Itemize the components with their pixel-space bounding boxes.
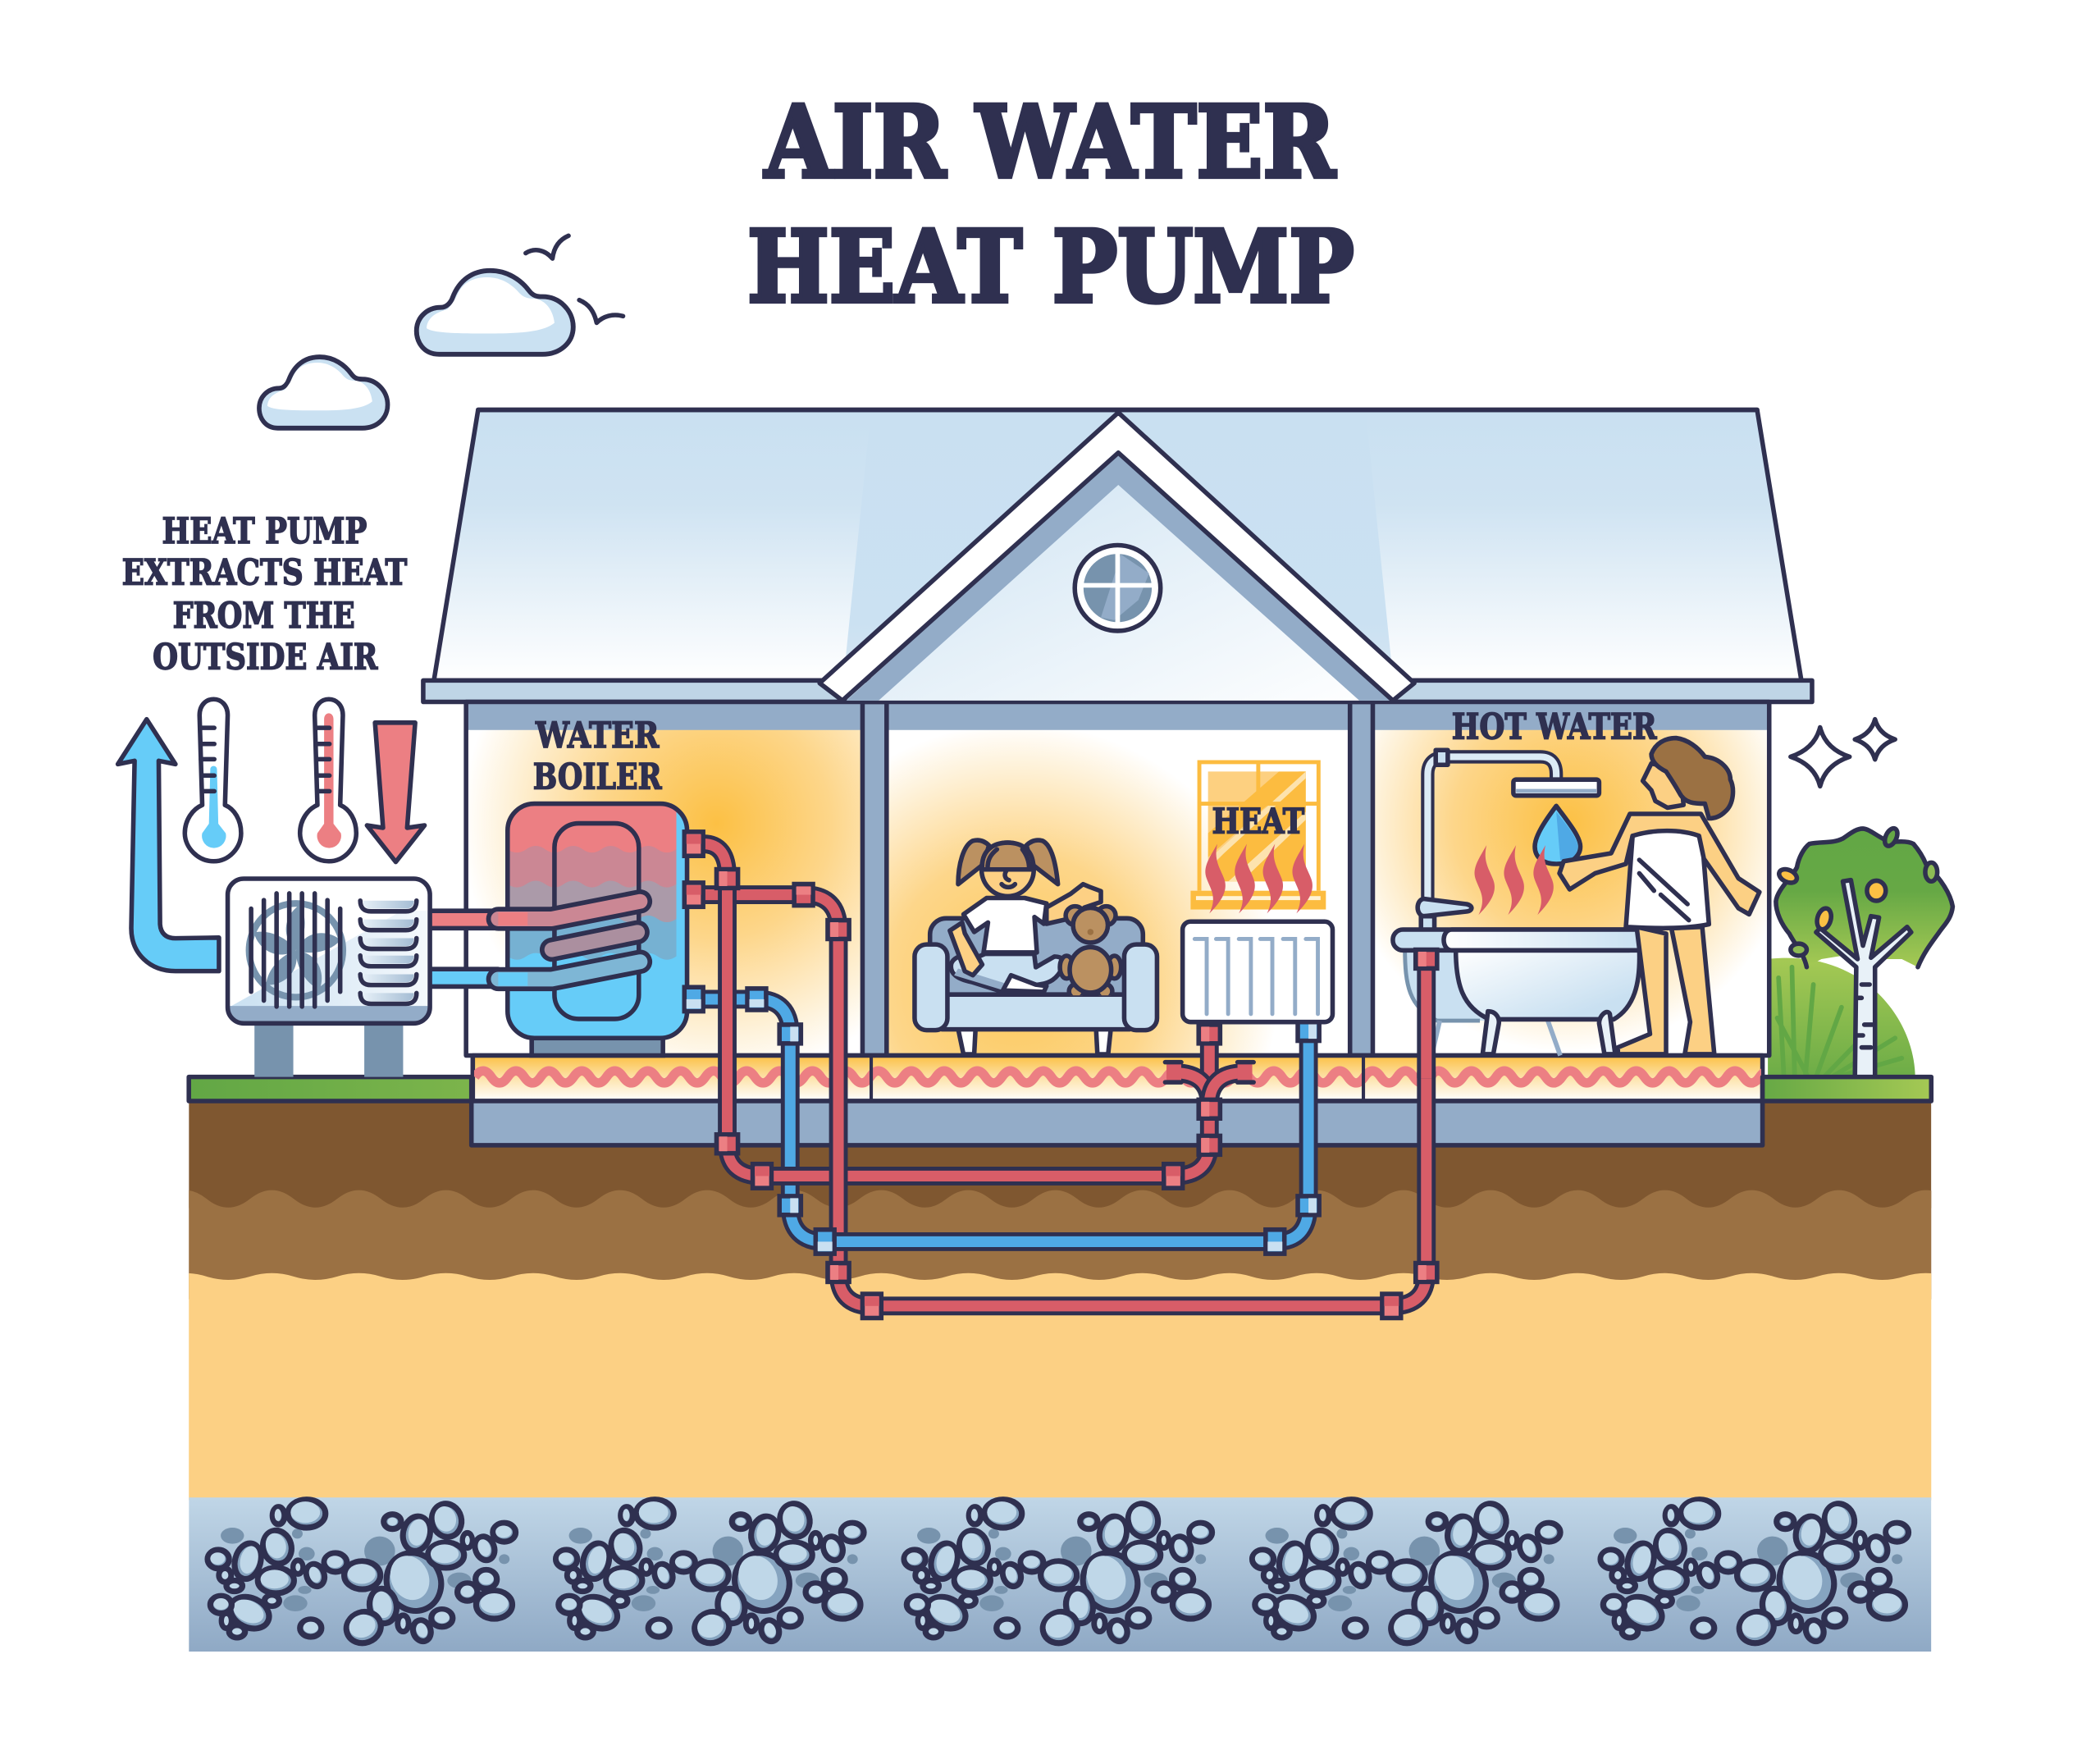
rock layer stones (208, 1500, 1909, 1648)
teddy bear (1060, 907, 1121, 998)
gable (819, 413, 1414, 701)
label: heat pump extracts heat from the outside air: EXTRACTS HEAT (122, 552, 407, 594)
title (747, 85, 1354, 325)
roof (434, 410, 1801, 680)
label: heat: HEAT (1212, 801, 1304, 841)
pipe: refrigerant blue (428, 969, 498, 986)
sparkles (1791, 720, 1895, 786)
label: water boiler: WATER (535, 715, 660, 756)
thermometer: warm (300, 699, 356, 861)
window with heat (1190, 762, 1326, 910)
pipe: hot feed upper horizontal (696, 895, 838, 930)
thermometer: cold (185, 699, 241, 861)
house walls (466, 701, 1769, 1055)
label: water boiler: BOILER (533, 756, 662, 798)
arrow: cold air out (118, 720, 219, 971)
bush behind house (1768, 958, 1915, 1078)
pipe: cold return vertical (684, 987, 825, 1241)
label: hot water: HOT WATER (1452, 706, 1657, 747)
pipe: cold return horizontal (815, 1022, 1319, 1254)
water drop (1535, 806, 1581, 864)
pipe: refrigerant red (428, 911, 498, 928)
fan (249, 903, 343, 997)
round attic window (1075, 545, 1161, 631)
eaves (423, 680, 1812, 701)
foundation (472, 1101, 1763, 1145)
grass right (1763, 1077, 1931, 1101)
label: heat pump extracts heat from the outside air: HEAT PUMP (162, 510, 367, 552)
radiator (1183, 921, 1332, 1022)
label: heat pump extracts heat from the outside air (122, 510, 407, 678)
heat waves: shower (1475, 845, 1554, 915)
sofa (915, 918, 1157, 1054)
heat pump outdoor unit (228, 879, 430, 1023)
pipe: radiator feed (684, 832, 1220, 1188)
birds (526, 235, 623, 322)
water boiler (489, 790, 687, 1055)
title: AIR WATER (764, 85, 1336, 201)
grass left (189, 1077, 472, 1101)
cloud: large (417, 271, 573, 354)
heat waves: radiator (1205, 844, 1312, 913)
outdoor unit legs (254, 1022, 403, 1077)
arrow: warm air in (367, 723, 425, 862)
floor heating band (472, 1055, 1859, 1101)
label: heat pump extracts heat from the outside air: OUTSIDE AIR (153, 636, 378, 678)
bathtub (1393, 930, 1640, 1055)
pipe: hot water feed (828, 921, 1437, 1318)
tree (1776, 826, 1952, 1078)
ground layers (162, 1101, 1947, 1652)
heat exchanger coil (498, 902, 640, 979)
girl (950, 840, 1101, 992)
shower (1418, 750, 1599, 931)
cloud: small (259, 357, 388, 428)
pipe: hot water riser to bath (1416, 950, 1437, 1078)
infographic: air water heat pump (115, 102, 1956, 1652)
floor heating branch (1165, 1062, 1253, 1118)
label: heat pump extracts heat from the outside air: FROM THE (173, 595, 355, 637)
label: water boiler (533, 715, 662, 798)
woman in towel (1559, 738, 1760, 1054)
title: HEAT PUMP (747, 209, 1354, 325)
